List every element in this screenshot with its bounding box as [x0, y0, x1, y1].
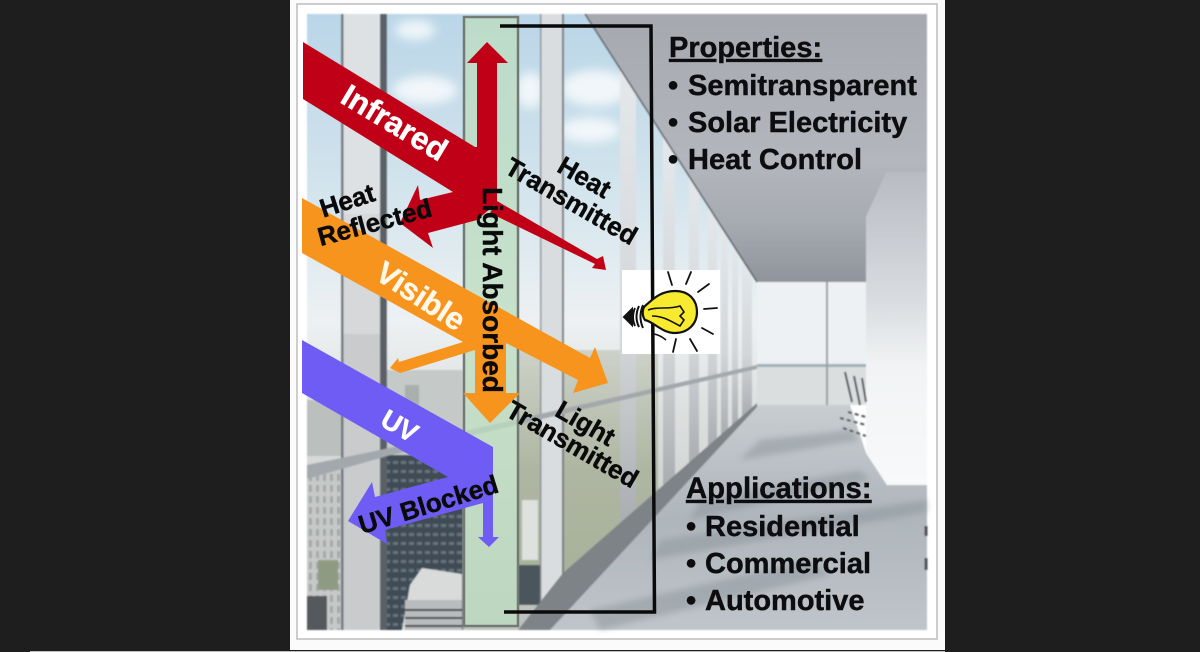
bulb filament — [648, 306, 684, 326]
label: Infrared: Infrared — [335, 77, 454, 168]
label: Heat Transmitted: Heat — [553, 150, 617, 204]
label: Light Transmitted: Transmitted — [501, 394, 644, 494]
list: property items: Heat Control — [688, 144, 862, 176]
floor reflection streaks — [590, 430, 927, 630]
window rail — [307, 365, 757, 479]
label: Light Transmitted: Light — [550, 394, 621, 452]
label: Heat Transmitted: Transmitted — [500, 151, 643, 251]
label: UV: UV — [376, 404, 423, 449]
sky and city seen through windows — [307, 14, 757, 630]
heading: Properties: Properties: — [669, 32, 822, 64]
heading: Applications: Applications: — [686, 472, 872, 505]
label: Light Absorbed: Light Absorbed — [477, 187, 508, 393]
label: Heat Reflected: Reflected — [314, 193, 435, 252]
ceiling edge shadow — [585, 14, 757, 282]
left vertical columns — [341, 14, 564, 630]
list: application items: • — [686, 585, 696, 617]
ceiling — [585, 14, 927, 282]
label: Visible: Visible — [370, 254, 472, 338]
black bracket: window outline — [500, 26, 654, 612]
list: property items: Solar Electricity — [688, 107, 907, 139]
list: property items — [668, 70, 917, 176]
list: application items: • — [686, 548, 696, 580]
concrete floor — [530, 405, 927, 630]
list: application items: Automotive — [705, 585, 864, 617]
text block: Properties — [668, 32, 917, 176]
uv arrow: beam with branches — [302, 340, 499, 547]
solar glass panel (green band) — [464, 17, 518, 626]
bulb lower arc — [654, 334, 666, 340]
list: application items: Residential — [705, 511, 860, 543]
background photo: office corridor with windows — [307, 14, 927, 630]
infrared arrow: main beam, upward and reflected branches — [303, 42, 508, 248]
infrared thin transmitted arrow — [490, 201, 606, 270]
bulb rays — [668, 272, 717, 352]
bulb glass — [643, 291, 697, 333]
list: property items: • — [668, 144, 678, 176]
list: property items: • — [668, 70, 678, 102]
white square behind bulb — [622, 270, 720, 354]
far end window — [757, 282, 867, 405]
label: Heat Reflected: Heat — [316, 177, 379, 223]
dark tower — [387, 455, 463, 630]
bulb screw base — [624, 305, 643, 328]
white picture frame — [30, 0, 945, 652]
list: property items: • — [668, 107, 678, 139]
visible arrow: main beam to lower right — [302, 198, 608, 423]
list: application items: • — [686, 511, 696, 543]
arrows — [302, 42, 608, 547]
right receding window columns — [620, 68, 752, 524]
label: UV Blocked: UV Blocked — [355, 469, 502, 540]
dark window base edge — [518, 403, 757, 630]
list: application items: Commercial — [705, 548, 871, 580]
white wall pillar — [866, 172, 927, 485]
list: property items: Semitransparent — [688, 70, 917, 102]
text block: Applications — [686, 472, 872, 617]
chairs — [840, 372, 926, 570]
pale building roof — [402, 568, 462, 630]
icon: light bulb — [624, 272, 717, 352]
list: application items — [686, 511, 871, 617]
